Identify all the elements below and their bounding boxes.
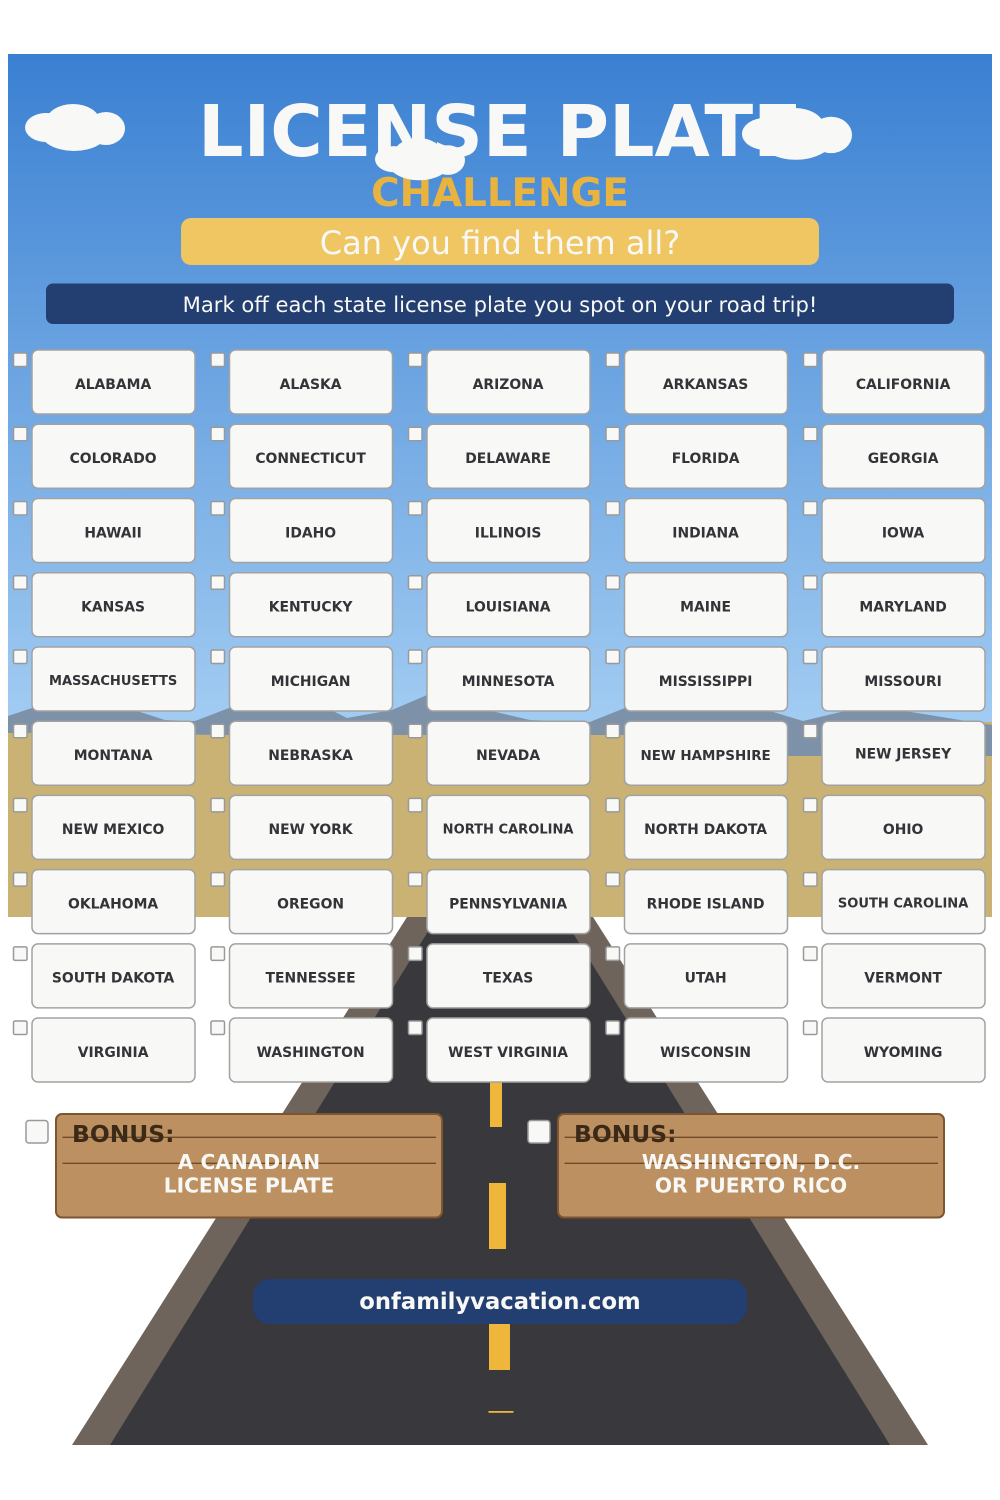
state: Wyoming: WYOMING: [864, 1045, 942, 1061]
state: South Dakota: [14, 944, 195, 1008]
sky background: [8, 54, 992, 724]
state: Arkansas: ARKANSAS: [663, 377, 748, 393]
state: Rhode Island: [606, 870, 788, 934]
state: Maine: MAINE: [680, 600, 731, 616]
state: Utah: [606, 944, 788, 1008]
state: Montana: [14, 721, 195, 785]
state: New Jersey: NEW JERSEY: [855, 746, 952, 762]
state: Idaho: IDAHO: [285, 525, 336, 541]
state: New York: NEW YORK: [269, 822, 354, 838]
tagline banner: Can you find them all?: [320, 224, 680, 262]
state: Texas: [408, 944, 590, 1008]
state: California: [804, 350, 985, 414]
state: Montana: MONTANA: [74, 748, 153, 764]
state: California: CALIFORNIA: [856, 377, 951, 393]
state: Wisconsin: WISCONSIN: [660, 1045, 751, 1061]
cloud left: [25, 104, 125, 151]
state: Colorado: COLORADO: [70, 451, 157, 467]
state: Nebraska: [211, 721, 392, 785]
tagline banner: [181, 218, 819, 265]
bonus text right: WASHINGTON, D.C.: [642, 1150, 860, 1174]
state: Alabama: ALABAMA: [75, 377, 151, 393]
bonus panel: Canadian plate: [26, 1114, 442, 1218]
state: Connecticut: [211, 424, 392, 488]
bonus checkbox left: [26, 1120, 48, 1143]
state: Kentucky: KENTUCKY: [269, 600, 353, 616]
state: Massachusetts: [14, 647, 195, 711]
state: Illinois: [408, 498, 590, 562]
bonus heading right: BONUS:: [574, 1120, 676, 1148]
state: Rhode Island: RHODE ISLAND: [647, 896, 765, 912]
state: Michigan: MICHIGAN: [271, 674, 350, 690]
state: Massachusetts: MASSACHUSETTS: [49, 674, 177, 689]
state: South Carolina: [804, 870, 985, 934]
state: Iowa: IOWA: [882, 525, 925, 541]
state: North Dakota: NORTH DAKOTA: [644, 822, 767, 838]
state: New Hampshire: [606, 721, 788, 785]
state: Arizona: ARIZONA: [473, 377, 544, 393]
state: Vermont: VERMONT: [864, 971, 942, 987]
bonus heading left: BONUS:: [72, 1120, 174, 1148]
state: Idaho: [211, 498, 392, 562]
road shoulder: [72, 917, 928, 1445]
state: Hawaii: [14, 498, 195, 562]
state: Kentucky: [211, 573, 392, 637]
instruction banner: Mark off each state license plate you spot on your road trip!: [183, 292, 817, 317]
bonus text left: A CANADIAN: [178, 1150, 320, 1174]
state: New Jersey: [804, 721, 985, 785]
state: Indiana: [606, 498, 788, 562]
state: Illinois: ILLINOIS: [475, 525, 541, 541]
state: Delaware: DELAWARE: [465, 451, 551, 467]
state: Michigan: [211, 647, 392, 711]
state: West Virginia: WEST VIRGINIA: [448, 1045, 568, 1061]
state: Maryland: MARYLAND: [859, 600, 947, 616]
state: Minnesota: MINNESOTA: [462, 674, 555, 690]
state: New Mexico: [14, 795, 195, 859]
state: South Dakota: SOUTH DAKOTA: [52, 971, 175, 987]
state: Oregon: OREGON: [277, 896, 344, 912]
state: Arkansas: [606, 350, 788, 414]
state: Louisiana: [408, 573, 590, 637]
state: Alabama: [14, 350, 195, 414]
state: North Carolina: [408, 795, 590, 859]
state: West Virginia: [408, 1018, 590, 1082]
state: Oklahoma: [14, 870, 195, 934]
state: Nevada: NEVADA: [476, 748, 540, 764]
state: Maine: [606, 573, 788, 637]
ground: [8, 722, 992, 917]
state: Hawaii: HAWAII: [84, 525, 142, 541]
title: LICENSE PLATE: [198, 90, 802, 173]
state: Mississippi: [606, 647, 788, 711]
state: Florida: FLORIDA: [672, 451, 740, 467]
cloud right: [742, 108, 852, 160]
state: Georgia: GEORGIA: [868, 451, 939, 467]
state: Nevada: [408, 721, 590, 785]
instruction banner: [46, 284, 954, 324]
state: Alaska: ALASKA: [280, 377, 342, 393]
state: Vermont: [804, 944, 985, 1008]
bonus panel: DC or Puerto Rico: [528, 1114, 944, 1218]
state: Washington: WASHINGTON: [257, 1045, 365, 1061]
state: Oklahoma: OKLAHOMA: [68, 896, 158, 912]
website pill: [253, 1279, 747, 1324]
state: Washington: [211, 1018, 392, 1082]
state: Alaska: [211, 350, 392, 414]
state: Georgia: [804, 424, 985, 488]
state: Tennessee: TENNESSEE: [266, 971, 356, 987]
state: Nebraska: NEBRASKA: [268, 748, 353, 764]
state: New Hampshire: NEW HAMPSHIRE: [640, 749, 771, 764]
state: Ohio: OHIO: [883, 822, 923, 838]
state: Maryland: [804, 573, 985, 637]
state: Kansas: KANSAS: [81, 600, 145, 616]
bonus panel: Canadian plate: LICENSE PLATE: [164, 1174, 334, 1198]
state: Connecticut: CONNECTICUT: [255, 451, 366, 467]
state: Minnesota: [408, 647, 590, 711]
state: South Carolina: SOUTH CAROLINA: [838, 897, 969, 912]
bonus panel: DC or Puerto Rico: OR PUERTO RICO: [655, 1174, 847, 1198]
state: Virginia: [14, 1018, 195, 1082]
state: Arizona: [408, 350, 590, 414]
state: Louisiana: LOUISIANA: [466, 600, 551, 616]
road centre dashes: [488, 1082, 514, 1413]
state: Ohio: [804, 795, 985, 859]
state: Wyoming: [804, 1018, 985, 1082]
state: Colorado: [14, 424, 195, 488]
state: Mississippi: MISSISSIPPI: [659, 674, 752, 690]
state: Virginia: VIRGINIA: [78, 1045, 149, 1061]
state: Indiana: INDIANA: [672, 525, 739, 541]
state: North Carolina: NORTH CAROLINA: [443, 822, 574, 838]
state: Delaware: [408, 424, 590, 488]
state: Texas: TEXAS: [483, 971, 533, 987]
cloud centre: [375, 138, 465, 180]
website pill: onfamilyvacation.com: [359, 1289, 641, 1315]
state: Kansas: [14, 573, 195, 637]
state: Pennsylvania: PENNSYLVANIA: [449, 896, 567, 912]
bonus sign left: [56, 1114, 442, 1218]
bonus sign right: [558, 1114, 944, 1218]
state: Oregon: [211, 870, 392, 934]
state: Wisconsin: [606, 1018, 788, 1082]
state: Missouri: MISSOURI: [864, 674, 942, 690]
bonus checkbox right: [528, 1120, 550, 1143]
state: New Mexico: NEW MEXICO: [62, 822, 165, 838]
state: Missouri: [804, 647, 985, 711]
state: Pennsylvania: [408, 870, 590, 934]
state: Utah: UTAH: [685, 971, 727, 987]
state: Florida: [606, 424, 788, 488]
road surface: [110, 917, 890, 1445]
subtitle: challenge: CHALLENGE: [371, 171, 629, 216]
mountains: [8, 695, 992, 756]
state: New York: [211, 795, 392, 859]
state: Tennessee: [211, 944, 392, 1008]
state: North Dakota: [606, 795, 788, 859]
state: Iowa: [804, 498, 985, 562]
